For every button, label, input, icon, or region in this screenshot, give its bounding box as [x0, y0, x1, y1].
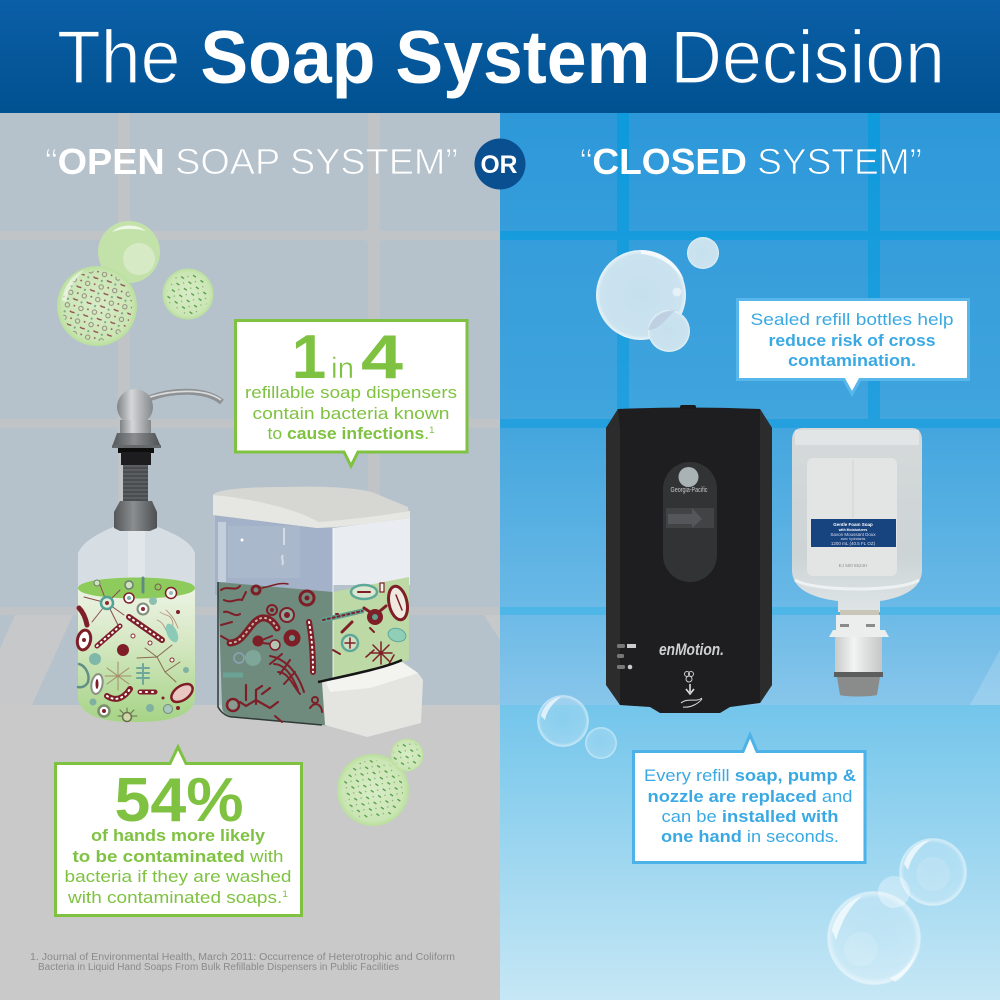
- bacteria art on bottle: [76, 578, 196, 722]
- callout: 1 in 4: 1: [292, 323, 326, 392]
- callout: every refill: nozzle are replaced and: [648, 788, 852, 806]
- drawer pump: [322, 662, 423, 737]
- label: Savon Moussant Doux: [830, 532, 876, 537]
- bacteria on right face: [323, 583, 410, 666]
- green germ bubbles lower right: [337, 738, 424, 826]
- label: [811, 519, 896, 547]
- label: 1200 mL (40.5 FL OZ): [831, 541, 876, 546]
- clear upper housing: [215, 515, 333, 595]
- callout: 1 in 4: contain bacteria known: [252, 405, 450, 423]
- clear box dispenser: [213, 487, 423, 737]
- callout: 54%: of hands more likely: [91, 827, 266, 845]
- panel: open soap system background: [0, 100, 509, 1000]
- footnote: 1. Journal of Environmental Health, March 2011: Occurrence of Heterotrophic and Coliform: [30, 952, 455, 963]
- callout: 54%: with contaminated soaps.: [68, 889, 254, 907]
- label: with Moisturizers: [838, 528, 867, 532]
- label: avec hydratants: [841, 537, 866, 541]
- lid: [213, 487, 410, 528]
- callout: 1 in 4: in: [331, 352, 354, 385]
- water bubbles middle: [537, 695, 617, 759]
- callout: every refill: one hand in seconds.: [661, 828, 839, 846]
- soap refill bottle: [792, 428, 922, 696]
- title banner: [0, 0, 1000, 113]
- enmotion black dispenser: [606, 405, 772, 713]
- callout: 54%: 1: [282, 889, 288, 899]
- callout: 1 in 4: refillable soap dispensers: [245, 384, 457, 402]
- callout: sealed refill bottles: [738, 300, 968, 394]
- callout: sealed refill bottles: reduce risk of cross: [768, 332, 936, 350]
- open pump bottle dispenser: [76, 389, 222, 722]
- callout: every refill: [634, 735, 865, 862]
- title banner: The Soap System Decision: [57, 15, 945, 99]
- badge: or: OR: [480, 151, 518, 179]
- bottle body: [78, 527, 195, 722]
- water bubbles upper: [596, 237, 719, 352]
- callout: sealed refill bottles: Sealed refill bottles help: [750, 311, 954, 329]
- callout: 1 in 4: 4: [361, 323, 404, 392]
- enmotion black dispenser: enMotion.: [659, 641, 724, 659]
- enmotion black dispenser: Georgia-Pacific: [670, 487, 708, 494]
- footnote: [30, 952, 455, 973]
- heading: closed system: “CLOSED SYSTEM”: [580, 141, 922, 182]
- callout: 54%: 54%: [114, 766, 244, 835]
- panel: closed system background: [500, 113, 1000, 1000]
- callout: 1 in 4: 1: [429, 425, 435, 435]
- pump head: [112, 389, 222, 531]
- soap refill bottle: EJ 500 5524H: [839, 563, 867, 568]
- callout: 1 in 4: [236, 320, 467, 466]
- bacteria on left dark face: [221, 583, 322, 722]
- callout: 1 in 4: to cause infections .: [268, 425, 429, 443]
- footnote: Bacteria in Liquid Hand Soaps From Bulk Refillable Dispensers in Public Facilities: [38, 962, 399, 973]
- callout: every refill: can be installed with: [662, 808, 838, 826]
- soap liquid faces: [333, 577, 409, 682]
- callout: 54%: to be contaminated with: [72, 848, 284, 866]
- callout: sealed refill bottles: contamination.: [788, 352, 916, 370]
- label: Gentle Foam Soap: [833, 522, 873, 527]
- water bubbles lower right: [827, 838, 967, 985]
- callout: 54%: bacteria if they are washed: [64, 868, 292, 886]
- contaminated liquid: [78, 578, 195, 722]
- green germ bubbles upper left: [57, 221, 214, 346]
- callout: every refill: Every refill soap, pump &: [644, 767, 856, 785]
- callout: 54%: [56, 747, 302, 916]
- heading: open soap system: “OPEN SOAP SYSTEM”: [45, 141, 458, 182]
- badge: or: [474, 138, 526, 190]
